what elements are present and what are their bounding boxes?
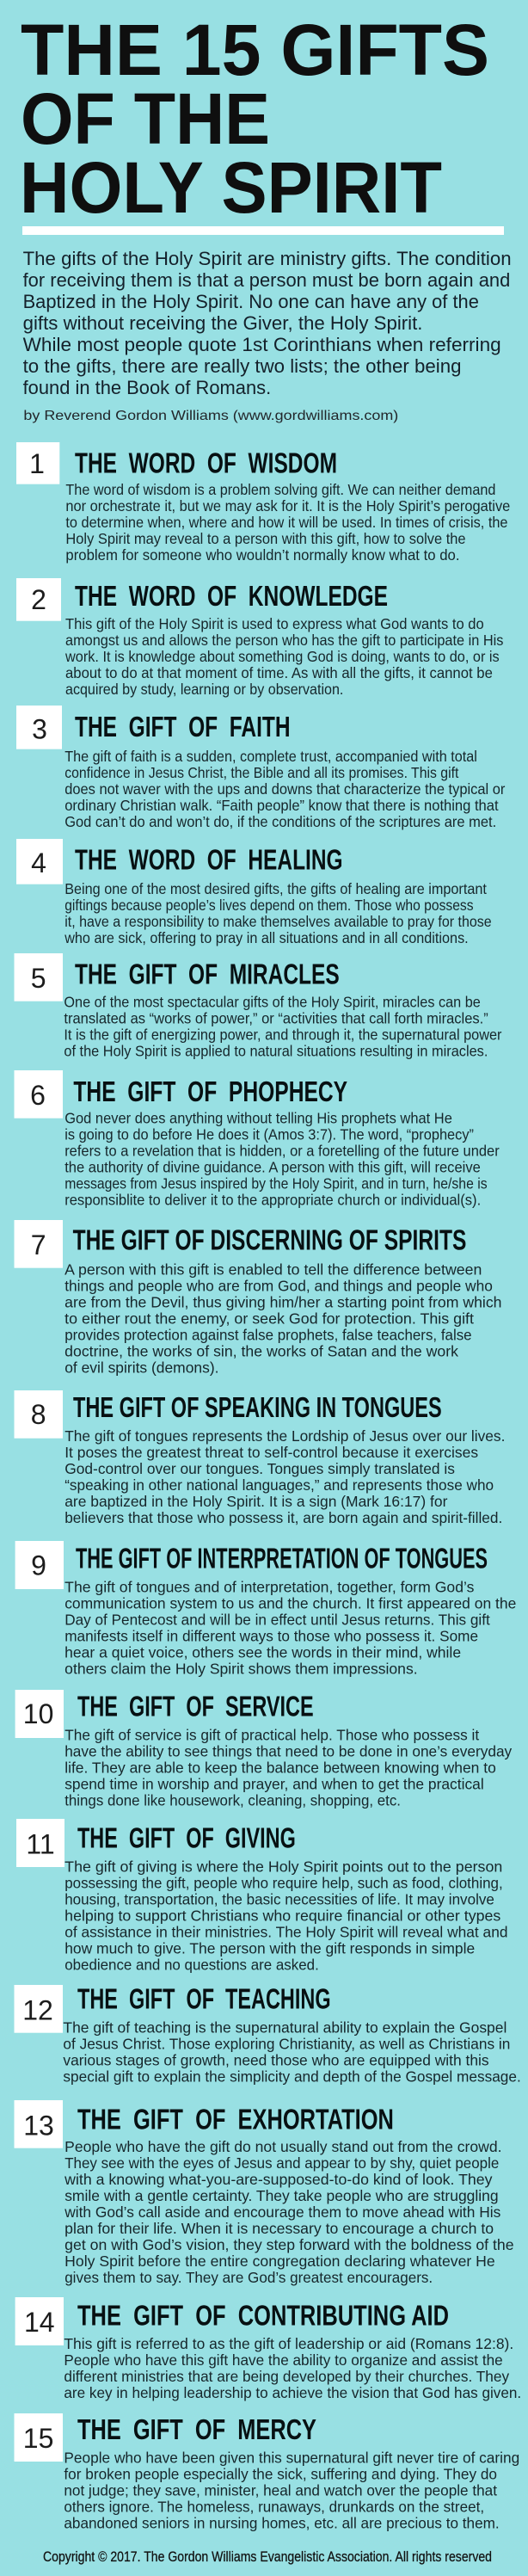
- body: gift 11: helping to support Christians who require financial or other types: [64, 1907, 501, 1925]
- title: THE 15 GIFTS: [21, 9, 489, 90]
- body: gift 5: [64, 994, 502, 1060]
- panel: gift 9: [15, 1541, 516, 1678]
- body: gift 12: [63, 2019, 521, 2086]
- body: gift 3: confidence in Jesus Christ, the Bible and all its promises. This gift: [64, 764, 459, 781]
- heading: gift 1: THE WORD OF WISDOM: [75, 447, 337, 478]
- body: gift 7: A person with this gift is enabled to tell the difference between: [64, 1261, 482, 1279]
- number badge 11: 11: [26, 1828, 55, 1859]
- intro paragraph: for receiving them is that a person must be born again and: [23, 269, 510, 291]
- body: gift 2: This gift of the Holy Spirit is used to express what God wants to do: [65, 615, 484, 632]
- body: gift 13: They see with the eyes of Jesus and appear to by shy, quiet people: [64, 2154, 499, 2172]
- body: gift 11: of assistance in their ministries. The Holy Spirit will reveal what and: [64, 1924, 507, 1941]
- body: gift 12: various stages of growth, need those who are equipped with this: [63, 2052, 489, 2069]
- number badge 1: [16, 442, 59, 484]
- body: gift 12: The gift of teaching is the supernatural ability to explain the Gospel: [63, 2019, 507, 2037]
- number badge 11: [16, 1819, 64, 1867]
- body: gift 1: [65, 481, 510, 564]
- body: gift 3: God can’t do and won’t do, if the conditions of the scriptures are met.: [64, 813, 496, 830]
- body: gift 10: [64, 1727, 512, 1809]
- heading: gift 15: THE GIFT OF MERCY: [77, 2413, 316, 2445]
- body: gift 6: the authority of divine guidance. A person with this gift, will receive: [64, 1159, 481, 1176]
- body: gift 13: with a knowing what-you-are-supposed-to-do kind of look. They: [64, 2171, 493, 2188]
- number badge 8: [14, 1390, 63, 1439]
- body: gift 7: doctrine, the works of sin, the works of Satan and the work: [64, 1343, 458, 1360]
- body: gift 10: life. They are able to keep the balance between knowing when to: [64, 1759, 496, 1777]
- intro paragraph: [23, 248, 512, 398]
- intro paragraph: While most people quote 1st Corinthians when referring: [23, 334, 501, 355]
- intro paragraph: to the gifts, there are really two lists; the other being: [23, 355, 461, 377]
- number badge 6: 6: [30, 1080, 46, 1111]
- body: gift 6: refers to a revelation that is hidden, or a foretelling of the future under: [64, 1143, 500, 1160]
- panel: gift 7: [14, 1220, 501, 1377]
- heading: gift 12: THE GIFT OF TEACHING: [77, 1982, 331, 2014]
- body: gift 7: provides protection against false prophets, false teachers, false: [64, 1327, 472, 1344]
- body: gift 11: possessing the gift, people who require help, such as food, clothing,: [64, 1875, 503, 1892]
- number badge 13: 13: [23, 2111, 54, 2142]
- heading: gift 5: THE GIFT OF MIRACLES: [75, 958, 340, 989]
- panel: gift 2: [16, 578, 504, 698]
- number badge 10: 10: [23, 1698, 53, 1729]
- intro paragraph: The gifts of the Holy Spirit are ministry gifts. The condition: [23, 248, 512, 269]
- body: gift 8: are baptized in the Holy Spirit. It is a sign (Mark 16:17) for: [64, 1493, 448, 1510]
- number badge 3: [16, 706, 62, 749]
- body: gift 10: have the ability to see things that need to be done in one’s everyday: [64, 1743, 512, 1760]
- body: gift 10: spend time in worship and prayer, and when to get the practical: [64, 1776, 484, 1793]
- body: gift 9: communication system to us and the church. It first appeared on the: [64, 1595, 516, 1612]
- body: gift 13: with God’s call aside and encourage them to move ahead with His: [64, 2203, 501, 2221]
- body: gift 2: about to do at that moment of time. As with all the gifts, it cannot be: [65, 664, 493, 681]
- panel: gift 12: [14, 1982, 521, 2086]
- body: gift 4: it, have a responsibility to make themselves available to pray for those: [64, 913, 492, 930]
- body: gift 8: “speaking in other national languages,” and represents those who: [64, 1476, 494, 1494]
- body: gift 2: amongst us and allows the person who has the gift to participate in His: [65, 632, 504, 649]
- body: gift 5: It is the gift of energizing power, and through it, the supernatural power: [64, 1026, 502, 1044]
- body: gift 4: giftings because people’s lives depend on them. Those who possess: [64, 897, 474, 914]
- number badge 1: 1: [29, 448, 45, 479]
- number badge 9: [15, 1541, 64, 1589]
- intro paragraph: found in the Book of Romans.: [23, 377, 271, 398]
- body: gift 7: are from the Devil, thus giving him/her a starting point from which: [64, 1294, 501, 1311]
- body: gift 3: ordinary Christian walk. “Faith people” know that there is nothing that: [64, 797, 499, 814]
- body: gift 12: special gift to explain the simplicity and depth of the Gospel message.: [63, 2068, 521, 2086]
- heading: gift 3: THE GIFT OF FAITH: [75, 711, 291, 743]
- body: gift 3: The gift of faith is a sudden, complete trust, accompanied with total: [64, 748, 477, 765]
- body: gift 13: [64, 2138, 514, 2286]
- body: gift 5: translated as “works of power,” or “activities that call forth miracles.”: [64, 1010, 488, 1027]
- body: gift 1: to determine when, where and how it will be used. In times of crisis, the: [65, 514, 507, 531]
- body: gift 13: gives them to say. They are God’s greatest encouragers.: [64, 2269, 433, 2286]
- body: gift 15: others ignore. The homeless, runaways, drunkards on the street,: [64, 2499, 484, 2516]
- number badge 15: [14, 2413, 63, 2462]
- body: gift 5: One of the most spectacular gifts of the Holy Spirit, miracles can be: [64, 994, 481, 1011]
- heading: gift 4: THE WORD OF HEALING: [75, 844, 343, 876]
- panel: gift 5: [14, 953, 502, 1060]
- panel: gift 14: [15, 2297, 521, 2401]
- body: gift 10: The gift of service is gift of practical help. Those who possess it: [64, 1727, 479, 1744]
- body: gift 14: different ministries that are being developed by their churches. They: [64, 2368, 509, 2385]
- body: gift 4: Being one of the most desired gifts, the gifts of healing are important: [64, 880, 487, 897]
- number badge 10: [15, 1690, 64, 1738]
- number badge 15: 15: [23, 2423, 53, 2454]
- body: gift 3: does not waver with the ups and downs that characterize the typical or: [64, 780, 506, 798]
- number badge 5: [14, 953, 63, 1001]
- panel: gift 3: [16, 706, 506, 830]
- body: gift 15: abandoned seniors in nursing homes, etc. all are precious to them.: [64, 2515, 500, 2532]
- body: gift 11: [64, 1858, 507, 1974]
- body: gift 14: [64, 2335, 521, 2401]
- body: gift 14: This gift is referred to as the gift of leadership or aid (Romans 12:8).: [64, 2335, 513, 2352]
- body: gift 1: The word of wisdom is a problem solving gift. We can neither demand: [65, 481, 495, 498]
- body: gift 8: [64, 1427, 505, 1526]
- number badge 9: 9: [31, 1550, 46, 1581]
- body: gift 11: how much to give. The person with the gift responds in simple: [64, 1940, 475, 1957]
- number badge 7: [14, 1220, 63, 1268]
- body: gift 8: The gift of tongues represents the Lordship of Jesus over our lives.: [64, 1427, 505, 1445]
- heading: gift 10: THE GIFT OF SERVICE: [77, 1690, 314, 1722]
- body: gift 1: Holy Spirit may reveal to a person with this gift, how to solve the: [65, 530, 466, 547]
- number badge 4: [16, 839, 63, 884]
- number badge 6: [14, 1070, 63, 1119]
- body: gift 13: Holy Spirit before the entire congregation declaring whatever He: [64, 2252, 495, 2270]
- intro paragraph: gifts without receiving the Giver, the Holy Spirit.: [23, 312, 423, 334]
- number badge 14: 14: [24, 2307, 55, 2338]
- body: gift 9: manifests itself in different ways to those who possess it. Some: [64, 1628, 478, 1645]
- number badge 12: [14, 1985, 63, 2033]
- panel: gift 6: [14, 1070, 500, 1209]
- body: gift 13: plan for their life. When it is necessary to encourage a church to: [64, 2220, 494, 2237]
- body: gift 2: [64, 615, 504, 698]
- body: gift 7: of evil spirits (demons).: [64, 1359, 218, 1377]
- body: gift 5: of the Holy Spirit is applied to natural situations resulting in miracles.: [64, 1043, 488, 1060]
- body: gift 6: messages from Jesus inspired by the Holy Spirit, and in turn, he/she is: [64, 1175, 488, 1192]
- panel: gift 8: [14, 1390, 505, 1526]
- body: gift 11: obedience and no questions are asked.: [64, 1957, 319, 1974]
- body: gift 15: People who have been given this supernatural gift never tire of caring: [64, 2450, 519, 2467]
- number badge 8: 8: [31, 1399, 46, 1430]
- body: gift 2: work. It is knowledge about something God is doing, wants to do, or is: [64, 648, 500, 665]
- number badge 7: 7: [31, 1229, 46, 1260]
- body: gift 7: [64, 1261, 501, 1377]
- heading: gift 6: THE GIFT OF PHOPHECY: [73, 1075, 347, 1107]
- body: gift 7: to either rout the enemy, or seek God for protection. This gift: [64, 1310, 474, 1328]
- panel: gift 1: [16, 442, 510, 564]
- byline: by Reverend Gordon Williams (www.gordwilliams.com): [23, 409, 398, 423]
- body: gift 11: The gift of giving is where the Holy Spirit points out to the person: [64, 1858, 502, 1876]
- body: gift 9: [64, 1579, 516, 1678]
- body: gift 7: things and people who are from God, and things and people who: [64, 1278, 493, 1295]
- body: gift 9: Day of Pentecost and will be in effect until Jesus returns. This gift: [64, 1612, 490, 1629]
- body: gift 12: of Jesus Christ. Those exploring Christianity, as well as Christians in: [63, 2036, 510, 2053]
- panel: gift 15: [14, 2413, 519, 2532]
- body: gift 8: It poses the greatest threat to self-control because it exercises: [64, 1444, 478, 1461]
- body: gift 8: God-control over our tongues. Tongues simply translated is: [64, 1460, 455, 1477]
- heading: gift 2: THE WORD OF KNOWLEDGE: [75, 580, 388, 612]
- body: gift 6: responsiblite to deliver it to the appropriate church or individual(s).: [64, 1192, 481, 1209]
- body: gift 1: nor orchestrate it, but we may ask for it. It is the Holy Spirit’s perogative: [65, 497, 510, 515]
- panel: gift 11: [16, 1819, 507, 1974]
- body: gift 15: [64, 2450, 519, 2532]
- body: gift 9: hear a quiet voice, others see the words in their mind, while: [64, 1644, 461, 1661]
- body: gift 2: acquired by study, learning or by observation.: [65, 681, 343, 698]
- body: gift 10: things done like housework, cleaning, shopping, etc.: [64, 1792, 401, 1809]
- body: gift 4: who are sick, offering to pray in all situations and in all conditions.: [64, 929, 469, 946]
- heading: gift 11: THE GIFT OF GIVING: [77, 1821, 296, 1853]
- number badge 2: 2: [31, 584, 46, 615]
- body: gift 14: People who have this gift have the ability to organize and assist the: [64, 2351, 503, 2369]
- body: gift 14: are key in helping leadership to achieve the vision that God has given.: [64, 2384, 521, 2401]
- body: gift 6: [64, 1110, 500, 1209]
- body: gift 1: problem for someone who wouldn’t normally know what to do.: [65, 546, 460, 564]
- number badge 13: [14, 2100, 63, 2148]
- number badge 5: 5: [31, 963, 46, 994]
- body: gift 11: housing, transportation, the basic necessities of life. It may involve: [64, 1891, 494, 1908]
- white divider bar: [22, 226, 504, 235]
- body: gift 9: others claim the Holy Spirit shows them impressions.: [64, 1661, 418, 1678]
- number badge 14: [15, 2297, 64, 2345]
- body: gift 6: God never does anything without telling His prophets what He: [64, 1110, 452, 1127]
- title: HOLY SPIRIT: [20, 147, 442, 228]
- body: gift 13: get on with God’s vision, they step forward with the boldness of the: [64, 2236, 514, 2253]
- intro paragraph: Baptized in the Holy Spirit. No one can have any of the: [23, 291, 479, 312]
- panel: gift 13: [14, 2100, 514, 2286]
- number badge 3: 3: [32, 713, 47, 744]
- body: gift 13: People who have the gift do not usually stand out from the crowd.: [64, 2138, 501, 2155]
- number badge 4: 4: [31, 847, 46, 878]
- body: gift 4: [64, 880, 492, 946]
- body: gift 8: believers that those who possess it, are born again and spirit-filled.: [64, 1509, 502, 1526]
- heading: gift 13: THE GIFT OF EXHORTATION: [77, 2104, 394, 2135]
- number badge 12: 12: [22, 1994, 53, 2025]
- number badge 2: [16, 578, 61, 621]
- body: gift 13: smile with a gentle certainty. They take people who are struggling: [64, 2187, 499, 2204]
- body: gift 15: not judge; they save, minister, heal and watch over the people that: [64, 2482, 497, 2499]
- panel: gift 4: [16, 839, 492, 946]
- body: gift 9: The gift of tongues and of interpretation, together, form God’s: [64, 1579, 475, 1596]
- body: gift 3: [64, 748, 506, 830]
- title: OF THE: [21, 78, 270, 159]
- title: [20, 9, 489, 228]
- body: gift 6: is going to do before He does it (Amos 3:7). The word, “prophecy”: [64, 1126, 474, 1143]
- panel: gift 10: [15, 1690, 512, 1809]
- body: gift 15: for broken people especially the sick, suffering and dying. They do: [64, 2466, 497, 2483]
